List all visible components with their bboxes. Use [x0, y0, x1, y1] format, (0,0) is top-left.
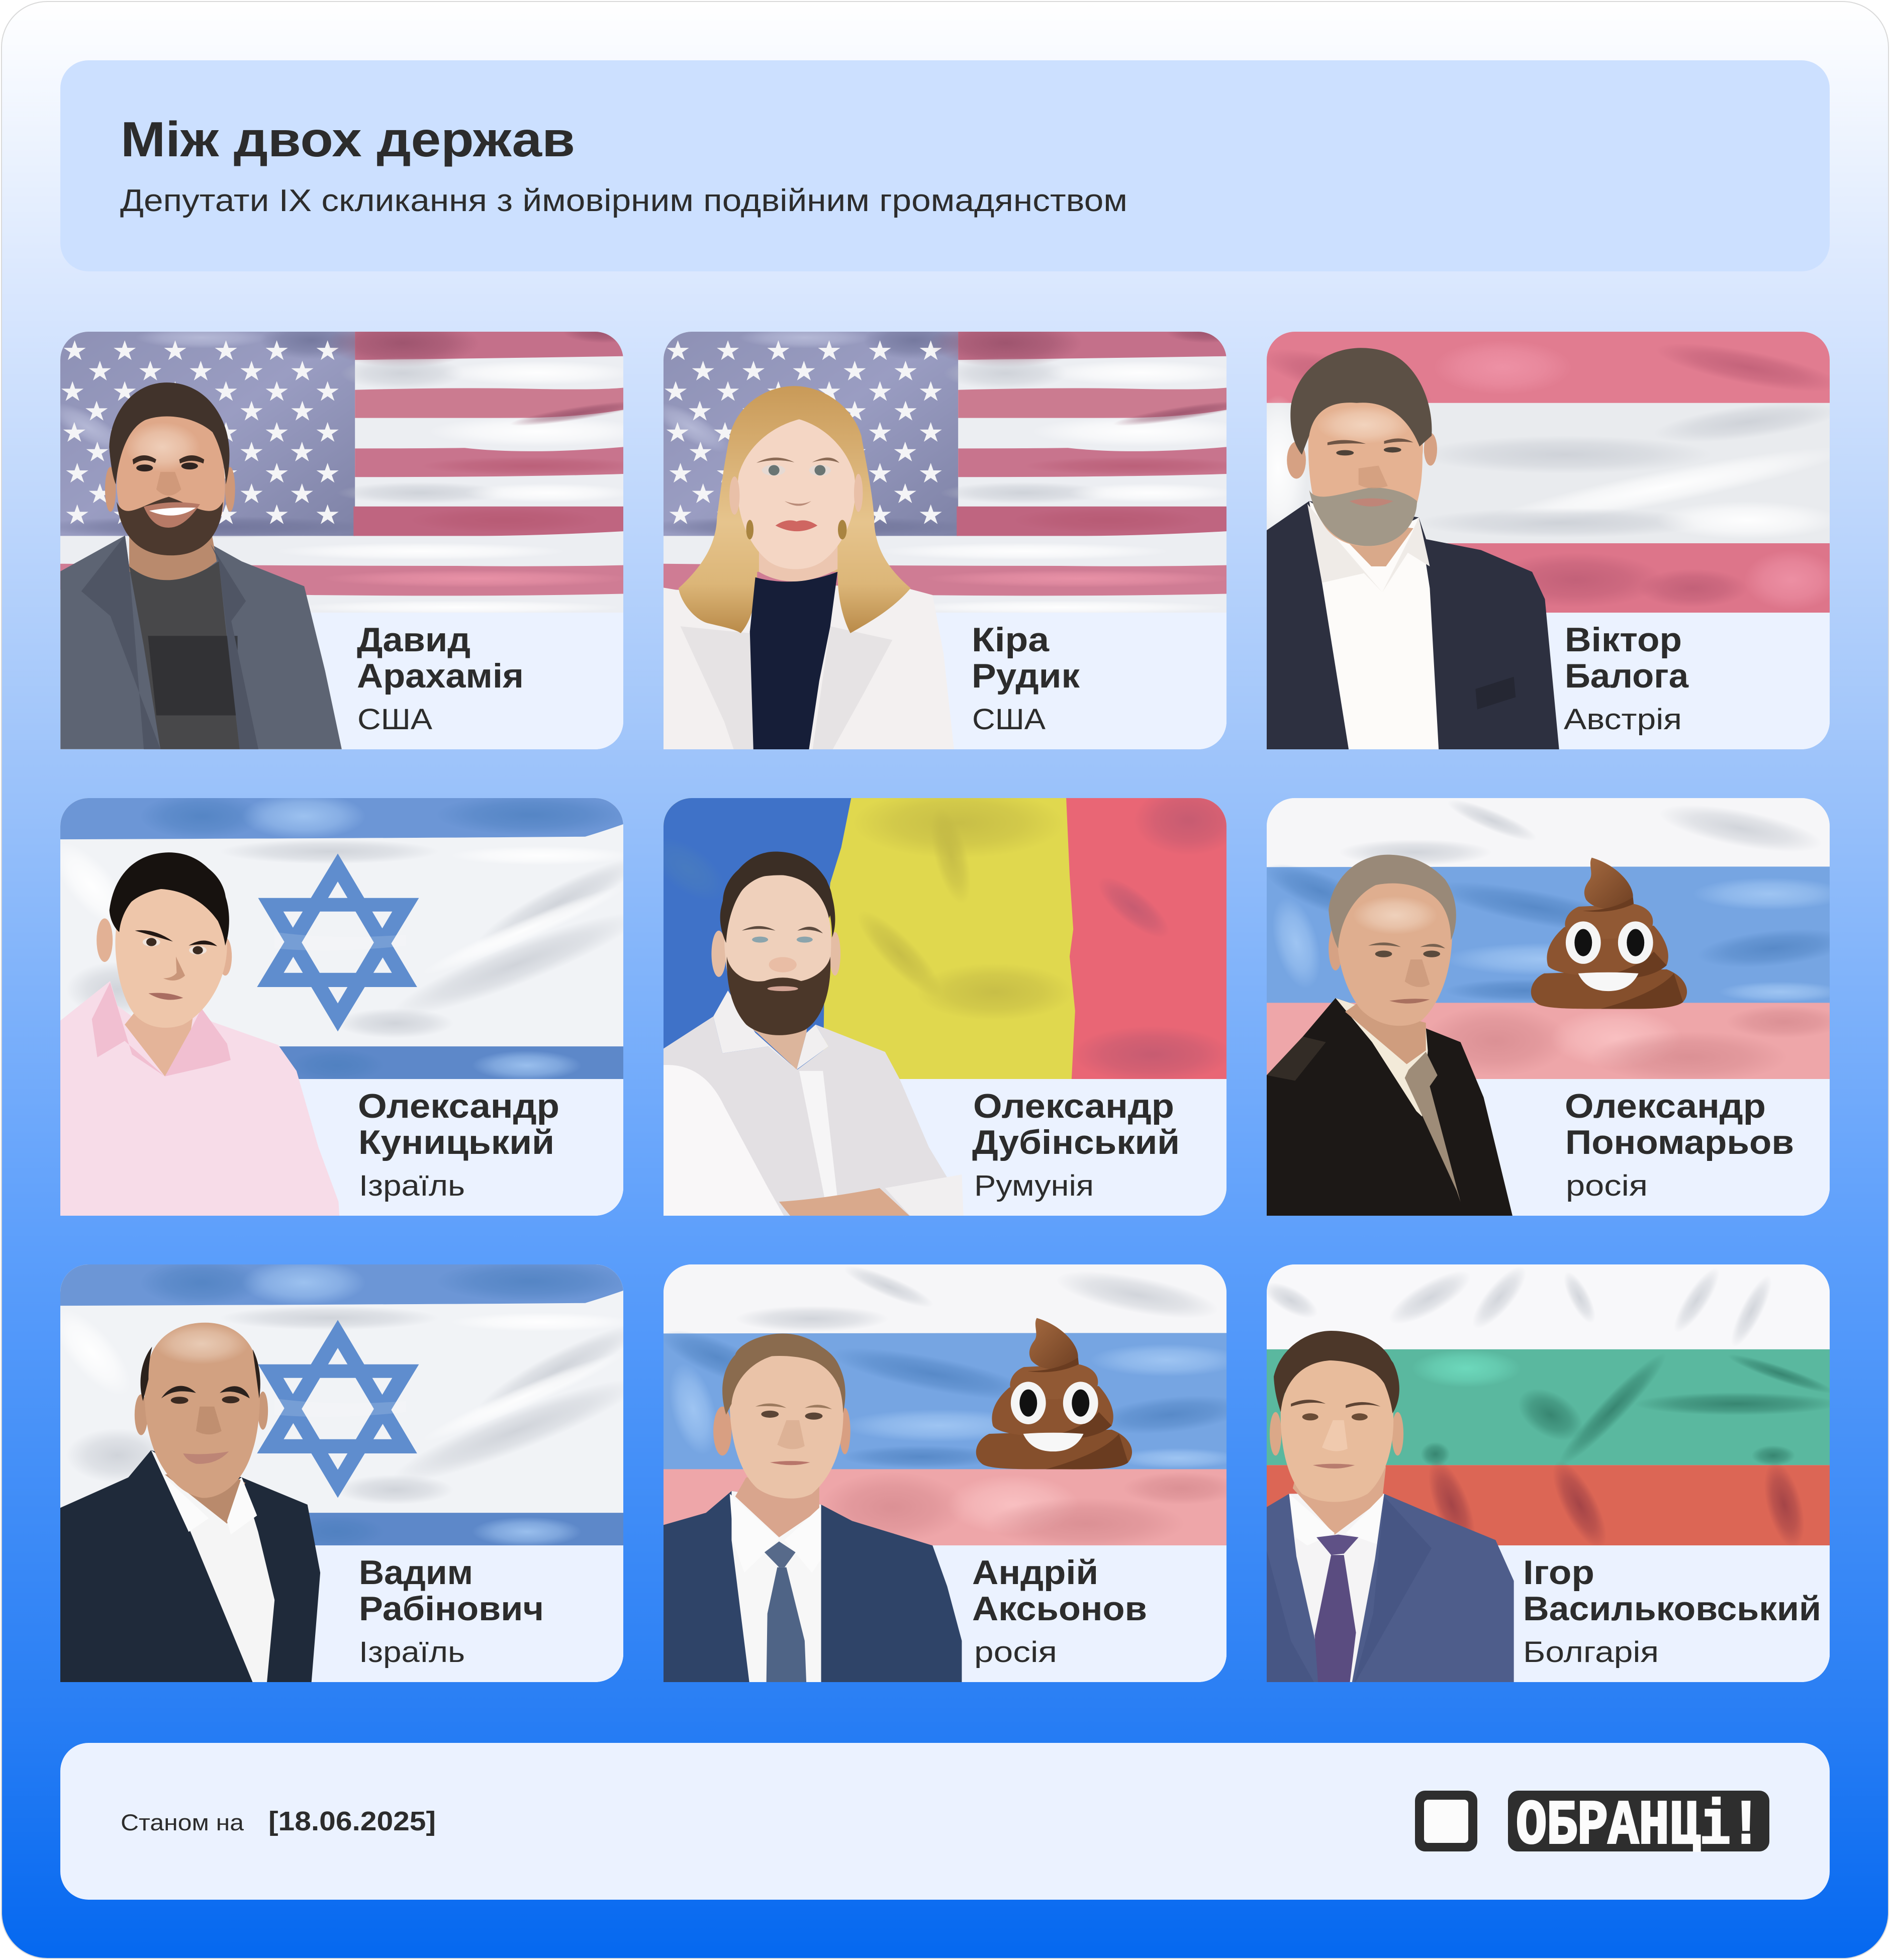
title: Між двох держав — [121, 112, 575, 167]
name: Кіра Рудик, США: Рудик — [972, 657, 1080, 695]
name: Олександр Дубінський, Румунія — [664, 798, 1226, 1216]
card: Вадим Рабінович — [60, 1264, 623, 1682]
name panel — [664, 613, 1226, 749]
name: Вадим Рабінович, Ізраїль: Ізраїль — [359, 1636, 465, 1669]
name: Олександр Пономарьов, росія: Олександр — [1565, 1087, 1766, 1125]
name: Олександр Пономарьов, росія — [1267, 798, 1830, 1216]
name: Давид Арахамія, США — [357, 621, 524, 736]
name: Вадим Рабінович, Ізраїль: Вадим — [359, 1553, 473, 1592]
name: Олександр Пономарьов, росія: Пономарьов — [1565, 1123, 1794, 1161]
flag: USA — [60, 332, 623, 749]
name panel — [1267, 613, 1830, 749]
card: Віктор Балога — [1267, 332, 1830, 749]
card: Андрій Аксьонов — [664, 1264, 1226, 1682]
name panel — [60, 1079, 623, 1216]
flag: Bulgaria — [1262, 1259, 1835, 1687]
name: Вадим Рабінович, Ізраїль: Рабінович — [359, 1590, 544, 1628]
date stamp — [60, 1743, 513, 1900]
portrait: Kunytskyi — [60, 852, 339, 1216]
name: Кіра Рудик, США: Кіра — [972, 621, 1050, 659]
flag: Romania — [658, 793, 1232, 1220]
name: Віктор Балога, Австрія: Віктор — [1565, 621, 1682, 659]
name: Олександр Дубінський, Румунія: Румунія — [974, 1169, 1094, 1202]
portrait: Rudyk — [664, 386, 954, 749]
name: Ігор Васильковський, Болгарія: Ігор — [1523, 1553, 1594, 1592]
name: Давид Арахамія, США: Давид — [357, 621, 470, 659]
name: Олександр Дубінський, Румунія: Олександр — [973, 1087, 1174, 1125]
name panel — [60, 1545, 623, 1682]
name: Андрій Аксьонов, росія: Андрій — [972, 1553, 1098, 1592]
card: Кіра Рудик — [664, 332, 1226, 749]
name: Олександр Куницький, Ізраїль: Куницький — [358, 1123, 554, 1161]
card: Давид Арахамія — [60, 332, 623, 749]
icon: poo emoji — [658, 1259, 1232, 1687]
name: Кіра Рудик, США: США — [972, 703, 1046, 736]
portrait: Aksonov — [658, 1259, 1232, 1687]
flag: russia — [658, 1259, 1232, 1687]
name: Олександр Куницький, Ізраїль: Ізраїль — [359, 1169, 465, 1202]
name: Ігор Васильковський, Болгарія: Васильковський — [1523, 1590, 1821, 1628]
name: Андрій Аксьонов, росія: Аксьонов — [972, 1590, 1147, 1628]
footer panel — [60, 1743, 1830, 1900]
logo: square mark — [1415, 1791, 1478, 1852]
name: Олександр Пономарьов, росія: росія — [1566, 1169, 1648, 1202]
card: Олександр Куницький — [60, 798, 623, 1216]
flag: russia — [1262, 793, 1835, 1220]
name panel — [1267, 1079, 1830, 1216]
name: Давид Арахамія, США: США — [357, 703, 432, 736]
subtitle: Депутати ІХ скликання з ймовірним подвійним громадянством — [120, 183, 1127, 218]
name: Ігор Васильковський, Болгарія: Болгарія — [1523, 1636, 1659, 1669]
icon: poo emoji — [1262, 793, 1835, 1220]
name: Олександр Куницький, Ізраїль: Олександр — [358, 1087, 559, 1125]
name panel — [1267, 1545, 1830, 1682]
card: Олександр Дубінський — [664, 798, 1226, 1216]
name panel — [664, 1079, 1226, 1216]
name panel — [664, 1545, 1226, 1682]
card: Ігор Васильковський — [1267, 1264, 1830, 1682]
portrait: Dubinskyi — [658, 793, 1232, 1220]
flag: USA — [664, 332, 1226, 749]
portrait: Baloha — [1267, 348, 1559, 749]
date stamp: [18.06.2025] — [268, 1806, 436, 1836]
portrait: Vasylkovskyi — [1262, 1259, 1835, 1687]
name panel — [60, 613, 623, 749]
card: Олександр Пономарьов — [1267, 798, 1830, 1216]
portrait: Rabinovych — [55, 1259, 628, 1687]
name: Олександр Дубінський, Румунія: Дубінський — [972, 1123, 1180, 1161]
name: Віктор Балога, Австрія — [1564, 621, 1689, 736]
name: Кіра Рудик, США — [972, 621, 1080, 736]
flag: Israel — [60, 798, 623, 1216]
portrait: Ponomarov — [1257, 794, 1860, 1226]
name: Андрій Аксьонов, росія — [664, 1264, 1226, 1682]
name: Олександр Куницький, Ізраїль — [358, 1087, 559, 1202]
name: Ігор Васильковський, Болгарія — [1267, 1264, 1830, 1682]
flag: Israel — [55, 1259, 628, 1687]
name: Андрій Аксьонов, росія: росія — [974, 1636, 1057, 1669]
flag: Austria — [1267, 332, 1830, 749]
name: Давид Арахамія, США: Арахамія — [357, 657, 524, 695]
date stamp: Станом на — [121, 1810, 244, 1835]
name: Віктор Балога, Австрія: Австрія — [1564, 703, 1682, 736]
name: Віктор Балога, Австрія: Балога — [1565, 657, 1689, 695]
portrait: Arakhamia — [60, 382, 342, 749]
header panel — [60, 60, 1830, 271]
name: Вадим Рабінович, Ізраїль — [60, 1264, 623, 1682]
